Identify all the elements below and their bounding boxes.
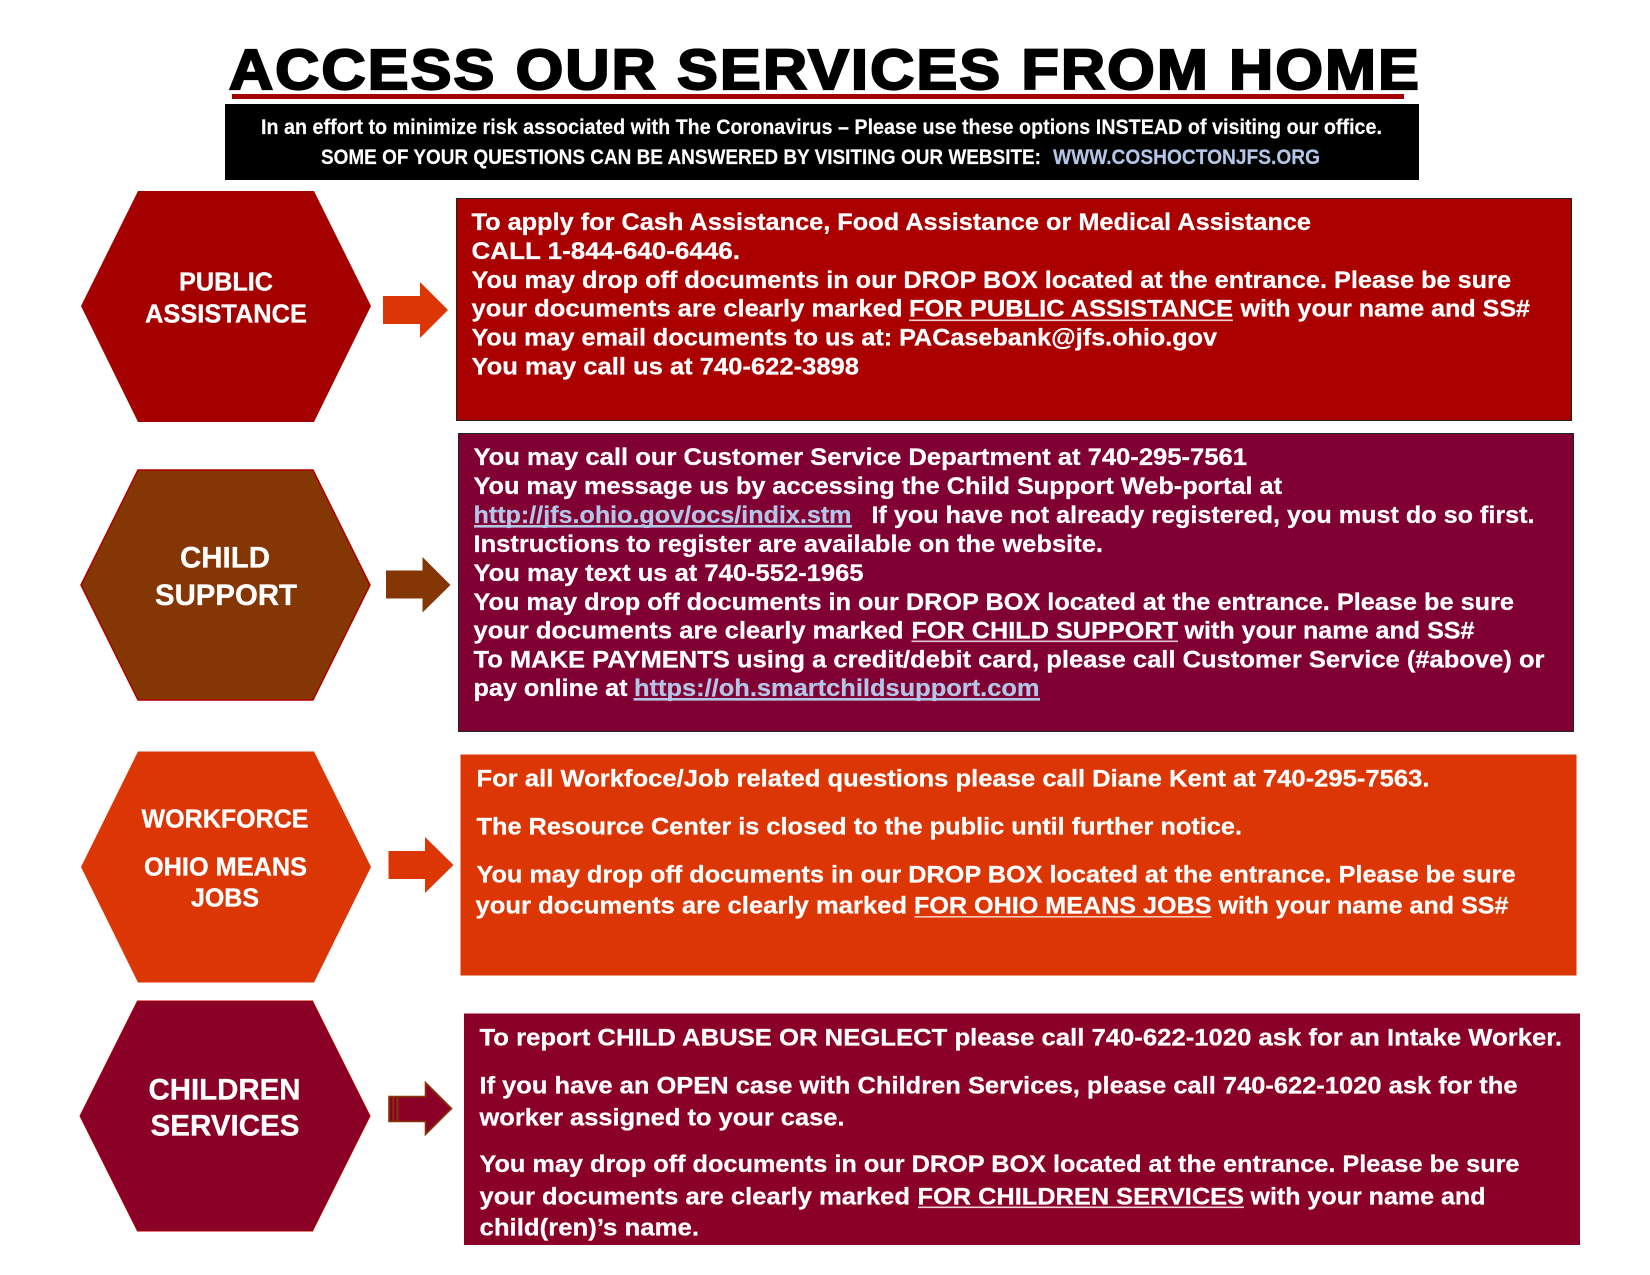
panel: workforce: your documents are clearly marked [476, 892, 907, 920]
hexagon: workforce / ohio means jobs: OHIO MEANS [144, 854, 307, 882]
hexagon: workforce / ohio means jobs: WORKFORCE [142, 806, 308, 834]
banner: coronavirus notice: In an effort to minimize risk associated with The Coronavirus – Please use these options INSTEAD of visiting our office. [261, 116, 1382, 139]
panel: child support: You may call our Customer Service Department at 740-295-7561 [474, 444, 1247, 471]
title red underline [232, 94, 1404, 99]
hexagon: children services: CHILDREN [148, 1074, 300, 1106]
panel: public assistance: You may email documents to us at: PACasebank@jfs.ohio.gov [472, 324, 1217, 352]
banner: coronavirus notice [225, 104, 1419, 180]
panel: public assistance: CALL 1-844-640-6446. [472, 238, 740, 265]
panel: workforce: The Resource Center is closed to the public until further notice. [476, 814, 1242, 840]
hexagon: workforce / ohio means jobs: JOBS [191, 884, 259, 912]
panel: child support [458, 434, 1574, 732]
panel: public assistance: You may call us at 740-622-3898 [472, 354, 859, 380]
panel: child support: You may text us at 740-552-1965 [474, 560, 864, 587]
hexagon: workforce / ohio means jobs [81, 752, 371, 982]
panel: child support: pay online at [474, 675, 628, 702]
hexagon: public assistance: PUBLIC [179, 268, 273, 296]
title: ACCESS OUR SERVICES FROM HOME [229, 38, 1419, 102]
panel: child support: your documents are clearly marked [474, 618, 904, 644]
panel: child support: If you have not already registered, you must do so first. [872, 502, 1534, 529]
panel: child support: You may message us by accessing the Child Support Web-portal at [474, 473, 1282, 500]
panel: child support: To MAKE PAYMENTS using a credit/debit card, please call Customer Service (#above) or [474, 646, 1545, 674]
panel: workforce: For all Workfoce/Job related questions please call Diane Kent at 740-295-7563. [476, 766, 1430, 792]
hexagon: children services: SERVICES [150, 1110, 300, 1142]
panel: child support: with your name and SS# [1183, 618, 1475, 644]
panel: workforce: FOR OHIO MEANS JOBS [914, 892, 1212, 920]
panel: children services [464, 1014, 1580, 1245]
panel: child support: http://jfs.ohio.gov/ocs/indix.stm [474, 502, 852, 529]
arrow: child support [386, 557, 450, 612]
arrow: public assistance [383, 282, 448, 338]
panel: child support: FOR CHILD SUPPORT [912, 618, 1178, 644]
panel: children services: FOR CHILDREN SERVICES [918, 1184, 1244, 1210]
arrow: workforce [388, 837, 454, 893]
panel: children services: worker assigned to your case. [478, 1104, 844, 1132]
panel: workforce: You may drop off documents in our DROP BOX located at the entrance. Please be sure [476, 862, 1516, 888]
hexagon: child support [81, 470, 370, 700]
hexagon: public assistance: ASSISTANCE [145, 300, 307, 328]
panel: public assistance: with your name and SS# [1239, 296, 1530, 322]
panel: children services: with your name and [1249, 1184, 1486, 1210]
panel: child support: Instructions to register are available on the website. [474, 531, 1103, 558]
panel: public assistance: You may drop off documents in our DROP BOX located at the entrance. Please be sure [472, 267, 1511, 294]
panel: children services: If you have an OPEN case with Children Services, please call 740-622-1020 ask for the [480, 1072, 1518, 1100]
panel: public assistance: FOR PUBLIC ASSISTANCE [909, 296, 1233, 322]
hexagon: child support: CHILD [180, 542, 270, 574]
panel: public assistance: To apply for Cash Assistance, Food Assistance or Medical Assistance [472, 209, 1311, 236]
hexagon: child support: SUPPORT [155, 579, 297, 612]
panel: children services: child(ren)’s name. [480, 1214, 699, 1242]
panel: workforce: with your name and SS# [1217, 892, 1509, 920]
panel: public assistance [456, 198, 1572, 420]
panel: children services: To report CHILD ABUSE OR NEGLECT please call 740-622-1020 ask for an Intake Worker. [480, 1024, 1562, 1052]
banner: coronavirus notice: WWW.COSHOCTONJFS.ORG [1053, 146, 1320, 169]
hexagon: public assistance [81, 191, 371, 422]
hexagon: children services [80, 1001, 370, 1231]
arrow: children services [389, 1082, 452, 1134]
panel: workforce [460, 754, 1576, 976]
banner: coronavirus notice: SOME OF YOUR QUESTIONS CAN BE ANSWERED BY VISITING OUR WEBSITE: [321, 146, 1041, 169]
panel: children services: You may drop off documents in our DROP BOX located at the entrance. Please be sure [480, 1151, 1520, 1178]
panel: child support: You may drop off documents in our DROP BOX located at the entrance. Please be sure [474, 589, 1514, 616]
panel: children services: your documents are clearly marked [480, 1184, 910, 1210]
panel: public assistance: your documents are clearly marked [472, 296, 902, 322]
panel: child support: https://oh.smartchildsupport.com [634, 675, 1040, 702]
